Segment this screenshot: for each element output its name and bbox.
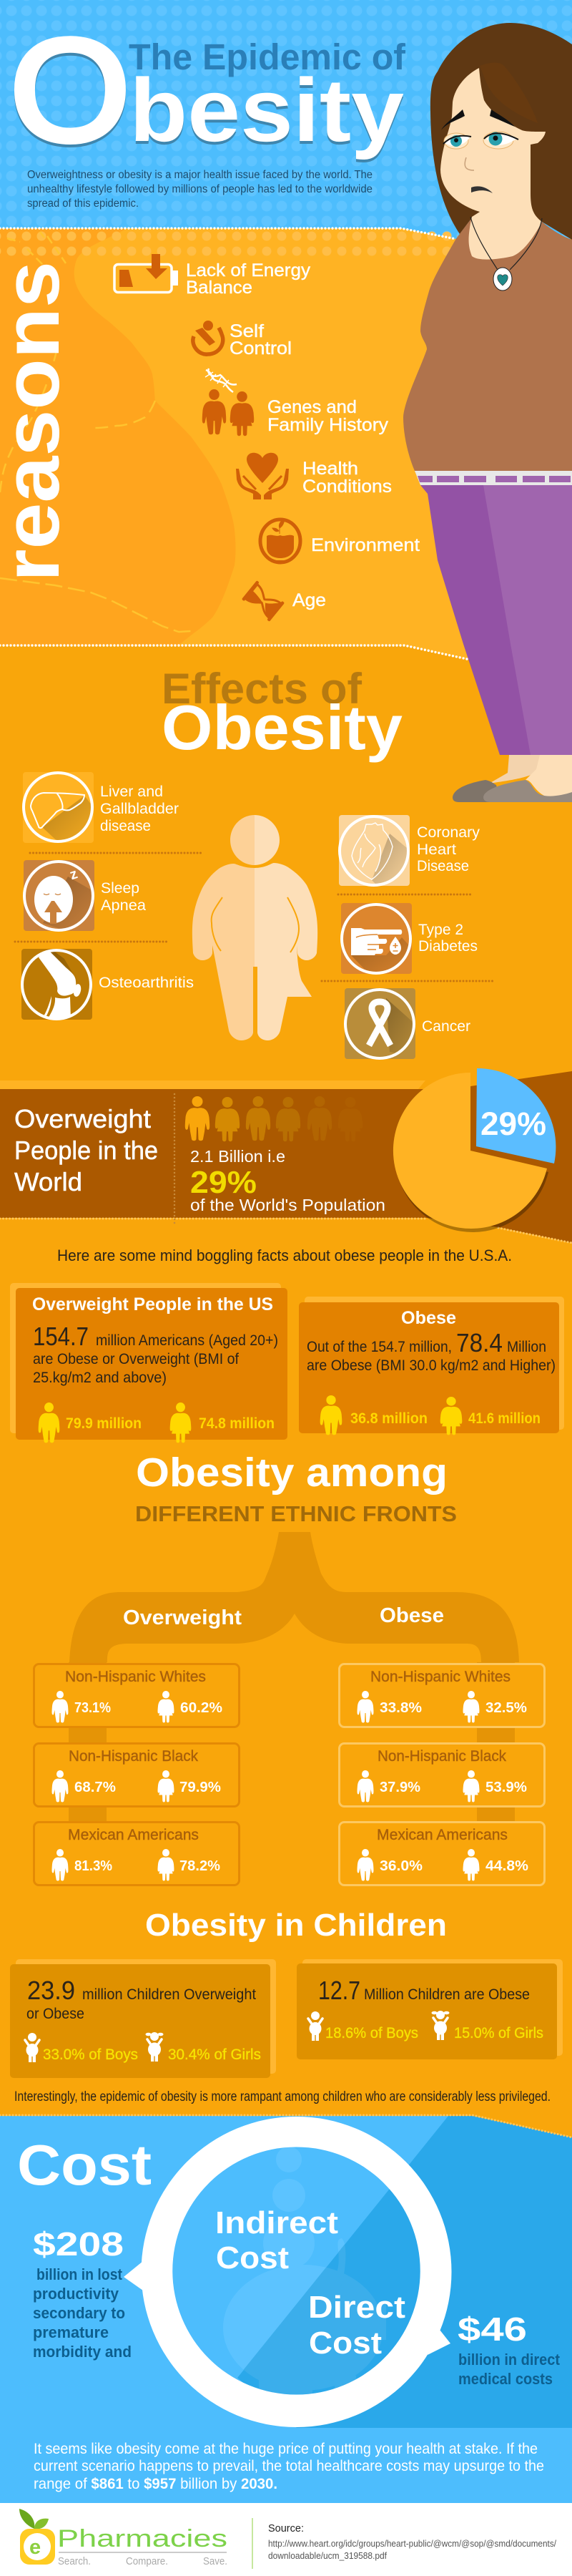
effect: cancer: Cancer xyxy=(422,1018,470,1035)
source: http://www.heart.org/idc/groups/heart-public/@wcm/@sop/@smd/documents/ xyxy=(268,2539,556,2549)
icon: woman xyxy=(170,1402,191,1443)
reason: health conditions xyxy=(236,453,392,499)
heading: People in the xyxy=(14,1136,158,1165)
panel: overweight people in the US: 79.9 million xyxy=(66,1415,142,1432)
panel: children overweight or obese: million Children Overweight xyxy=(82,1986,256,2003)
label: direct cost: Direct xyxy=(308,2290,405,2325)
panel: overweight people in the world: of the World's Population xyxy=(190,1196,385,1214)
panel: overweight people in the world: 2.1 Billion i.e xyxy=(190,1147,285,1166)
label: direct cost xyxy=(308,2290,405,2361)
box: overweight, non-hispanic black: 79.9% xyxy=(179,1780,221,1795)
effect: liver and gallbladder disease: Gallbladder xyxy=(100,801,179,817)
effect: coronary heart disease: Heart xyxy=(417,841,456,858)
icon: girl xyxy=(146,2032,163,2062)
box: overweight, non-hispanic whites: 73.1% xyxy=(74,1700,111,1716)
callout: $208 indirect: $208 xyxy=(33,2225,124,2263)
panel: overweight people in the US: 25.kg/m2 and above) xyxy=(33,1370,167,1386)
footer xyxy=(0,2503,572,2576)
label: obese branch: Obese xyxy=(380,1604,444,1627)
text: healthcare cost projection: It seems like obesity come at the huge price of putting your health at stake. If the xyxy=(34,2440,538,2457)
callout: $46 direct: medical costs xyxy=(458,2370,553,2388)
box: obese, non-hispanic black: Non-Hispanic Black xyxy=(378,1748,506,1765)
icon: man xyxy=(320,1395,342,1435)
icon: finger and blood drop xyxy=(341,903,415,977)
text: mind boggling facts intro: Here are some mind boggling facts about obese people in the U.S.A. xyxy=(57,1246,512,1264)
panel: children overweight or obese: 30.4% of Girls xyxy=(168,2046,261,2063)
reason: genes and family history: Genes and xyxy=(267,397,357,417)
label: overweight branch: Overweight xyxy=(123,1606,242,1629)
icon: sleeping head with mask: z xyxy=(68,866,79,883)
effect: sleep apnea xyxy=(24,860,146,931)
title: The Epidemic of Obesity: besity xyxy=(129,61,404,160)
heading: Effects of Obesity: Obesity xyxy=(162,692,403,763)
effect: cancer xyxy=(345,988,470,1059)
effect: coronary heart disease xyxy=(339,815,480,887)
pointer: indirect cost xyxy=(124,2261,143,2290)
box: overweight, non-hispanic black: Non-Hispanic Black xyxy=(69,1748,198,1765)
box: obese, mexican americans: Mexican Americans xyxy=(377,1827,508,1843)
callout: $208 indirect: premature xyxy=(33,2323,109,2341)
panel: obese in the US: are Obese (BMI 30.0 kg/m2 and Higher) xyxy=(307,1357,556,1374)
panel: children overweight or obese: or Obese xyxy=(26,2006,84,2022)
reason: genes and family history xyxy=(202,369,389,436)
effect: osteoarthritis: Osteoarthritis xyxy=(99,975,194,991)
icon: boy xyxy=(25,2033,39,2062)
title: The Epidemic of Obesity: besity xyxy=(129,64,404,163)
box: overweight, mexican americans: 81.3% xyxy=(74,1858,112,1874)
logo: ePharmacies xyxy=(19,2509,227,2567)
effect: liver and gallbladder disease: Liver and xyxy=(100,784,163,800)
section background: header xyxy=(0,0,572,247)
box: obese, non-hispanic whites: Non-Hispanic Whites xyxy=(370,1669,511,1685)
box: obese, non-hispanic whites: 33.8% xyxy=(380,1700,422,1716)
icon: awareness ribbon xyxy=(345,988,418,1059)
callout: $46 direct: $46 xyxy=(458,2311,527,2348)
reason: self control xyxy=(193,321,292,358)
panel: cost background xyxy=(0,2115,572,2503)
intro text xyxy=(27,169,373,210)
heading: Effects of Obesity: Effects of xyxy=(162,665,363,713)
effect: type 2 diabetes xyxy=(341,903,478,977)
reason: environment: Environment xyxy=(311,535,420,555)
label: indirect cost: Cost xyxy=(216,2240,289,2275)
box: overweight, non-hispanic whites: Non-Hispanic Whites xyxy=(65,1669,206,1685)
source: downloadable/ucm_319588.pdf xyxy=(268,2551,388,2561)
icon: battery xyxy=(114,254,178,292)
panel: children overweight or obese xyxy=(10,1959,276,2078)
source: Source: xyxy=(268,2522,304,2534)
effect: sleep apnea: Sleep xyxy=(101,880,139,897)
box: obese, non-hispanic black: 37.9% xyxy=(380,1780,420,1795)
box: overweight, non-hispanic black xyxy=(34,1743,239,1806)
panel: children obese xyxy=(297,1959,563,2059)
effect: liver and gallbladder disease xyxy=(23,772,179,852)
box: obese, non-hispanic whites xyxy=(339,1664,545,1727)
dotted divider: header to reasons xyxy=(0,228,456,239)
panel: obese in the US: 78.4 xyxy=(456,1328,503,1357)
box: obese, non-hispanic whites: 32.5% xyxy=(485,1700,527,1716)
illustration: sad overweight woman xyxy=(403,23,572,802)
heading: obesity among different ethnic fronts xyxy=(135,1450,457,1526)
panel: obese in the US: 41.6 million xyxy=(468,1410,541,1427)
ring with pointers xyxy=(142,2117,452,2427)
box: overweight, non-hispanic whites xyxy=(34,1664,239,1727)
pointer: direct cost xyxy=(428,2330,450,2355)
box: overweight, mexican americans: Mexican Americans xyxy=(68,1827,199,1843)
reason: age: Age xyxy=(292,590,326,610)
panel: children obese: 12.7 xyxy=(318,1976,360,2005)
panel: obese in the US xyxy=(299,1297,564,1435)
callout: $208 indirect: secondary to xyxy=(33,2304,125,2322)
panel: obese in the US: Out of the 154.7 million, xyxy=(307,1339,452,1355)
logo: ePharmacies: Compare. xyxy=(126,2555,168,2567)
pie chart: 29% xyxy=(393,1068,556,1232)
reason: self control: Control xyxy=(230,338,292,358)
icon: piggy bank and coins xyxy=(223,2147,386,2398)
logo: ePharmacies: Search. xyxy=(58,2555,91,2567)
reason: lack of energy balance xyxy=(114,254,311,298)
panel: overweight people in the US: are Obese or Overweight (BMI of xyxy=(33,1351,239,1367)
effect: osteoarthritis xyxy=(21,948,194,1020)
box: obese, mexican americans xyxy=(339,1822,545,1885)
panel: overweight people in the world xyxy=(0,1071,572,1243)
effect: sleep apnea: Apnea xyxy=(101,897,146,914)
reason: lack of energy balance: Lack of Energy xyxy=(186,260,311,280)
effect: type 2 diabetes: Diabetes xyxy=(418,938,478,955)
icon: sleeping head with mask xyxy=(24,860,97,931)
box: obese, non-hispanic black: 53.9% xyxy=(485,1780,527,1795)
reason: health conditions: Conditions xyxy=(302,477,392,497)
icon: hands and heart xyxy=(236,453,289,499)
effect: coronary heart disease: Disease xyxy=(417,858,469,874)
panel: children overweight or obese: 23.9 xyxy=(27,1976,75,2005)
title: The Epidemic of Obesity xyxy=(10,9,406,175)
callout: $208 indirect: billion in lost xyxy=(36,2265,123,2283)
reason: lack of energy balance: Balance xyxy=(186,278,252,298)
panel: overweight people in the US: Overweight People in the US xyxy=(32,1294,273,1314)
reason: age xyxy=(242,580,326,622)
text: healthcare cost projection: range of $861 to $957 billion by 2030. xyxy=(34,2475,277,2492)
box: obese, mexican americans: 44.8% xyxy=(485,1858,528,1874)
title: The Epidemic of Obesity: The Epidemic of xyxy=(129,36,406,77)
heading: Overweight xyxy=(14,1104,151,1133)
panel: overweight people in the US: 154.7 xyxy=(33,1322,89,1351)
icon: person in ring xyxy=(193,321,223,354)
icon: knee joint xyxy=(21,948,92,1020)
effect: type 2 diabetes: Type 2 xyxy=(418,922,463,938)
source xyxy=(268,2522,556,2561)
intro text: Overweightness or obesity is a major health issue faced by the world. The xyxy=(27,169,373,181)
heading: obesity among different ethnic fronts: DIFFERENT ETHNIC FRONTS xyxy=(135,1501,457,1526)
panel: obese in the US: 36.8 million xyxy=(350,1410,428,1427)
effect: coronary heart disease: Coronary xyxy=(417,824,480,841)
box: obese, mexican americans: 36.0% xyxy=(380,1858,423,1874)
section background: reasons xyxy=(0,228,572,659)
box: overweight, non-hispanic black: 68.7% xyxy=(74,1780,116,1795)
intro text: unhealthy lifestyle followed by millions of people has led to the worldwide xyxy=(27,183,373,195)
text: healthcare cost projection xyxy=(34,2440,544,2492)
figure: body silhouette xyxy=(192,815,317,1040)
callout: $208 indirect xyxy=(33,2225,132,2361)
heading: obesity in children: Obesity in Children xyxy=(145,1908,447,1943)
callout: $46 direct xyxy=(458,2311,561,2388)
band background xyxy=(0,1071,572,1243)
box: overweight, non-hispanic whites: 60.2% xyxy=(180,1700,222,1716)
heading xyxy=(14,1104,158,1196)
reason: environment xyxy=(260,519,420,564)
panel: overweight people in the US xyxy=(10,1283,287,1443)
icon: dna and couple xyxy=(202,369,254,436)
icon: woman xyxy=(440,1397,462,1435)
icon: plant in recycling ring xyxy=(260,519,300,564)
label: direct cost: Cost xyxy=(309,2326,382,2361)
panel: children obese: Million Children are Obese xyxy=(364,1986,530,2003)
callout: $208 indirect: productivity xyxy=(33,2285,119,2303)
panel: obese in the US: Million xyxy=(507,1339,546,1355)
dotted divider: reasons to effects xyxy=(0,645,467,659)
bracket connector xyxy=(69,1532,519,1823)
panel: overweight people in the world: 29% xyxy=(190,1165,257,1200)
box: obese, non-hispanic black xyxy=(339,1743,545,1806)
icon: boy xyxy=(308,2011,322,2041)
panel: overweight people in the US: 74.8 million xyxy=(199,1415,275,1432)
panel: children obese: 15.0% of Girls xyxy=(454,2025,543,2041)
icon: girl xyxy=(432,2011,449,2040)
box: overweight, mexican americans xyxy=(34,1822,239,1885)
callout: $46 direct: billion in direct xyxy=(458,2351,561,2368)
title: The Epidemic of Obesity: O xyxy=(10,12,130,175)
logo: ePharmacies: Pharmacies xyxy=(57,2525,227,2552)
heading: obesity among different ethnic fronts: Obesity among xyxy=(136,1450,448,1496)
panel: children obese: 18.6% of Boys xyxy=(325,2025,418,2041)
effect: liver and gallbladder disease: disease xyxy=(100,818,151,834)
pie chart: 29%: 29% xyxy=(480,1106,546,1142)
pictogram row xyxy=(185,1096,363,1141)
icon: anatomical heart xyxy=(339,815,411,887)
label: indirect cost: Indirect xyxy=(215,2205,338,2240)
title: The Epidemic of Obesity: O xyxy=(10,9,130,172)
label: indirect cost xyxy=(215,2205,338,2275)
panel: overweight people in the US: million Americans (Aged 20+) xyxy=(96,1332,278,1349)
icon: liver xyxy=(22,771,94,843)
logo: ePharmacies: e xyxy=(29,2536,41,2559)
panel: children overweight or obese: 33.0% of Boys xyxy=(43,2046,138,2063)
logo: ePharmacies: Save. xyxy=(203,2555,227,2567)
heading: Cost: Cost xyxy=(17,2133,152,2197)
reason: genes and family history: Family History xyxy=(267,415,389,435)
panel: obese in the US: Obese xyxy=(401,1308,456,1328)
reason: health conditions: Health xyxy=(302,459,358,479)
icon: man xyxy=(39,1402,59,1443)
reason: self control: Self xyxy=(230,321,264,341)
heading: Effects of Obesity xyxy=(162,665,403,763)
icon: hourglass xyxy=(242,580,285,622)
intro text: spread of this epidemic. xyxy=(27,197,139,210)
heading: World xyxy=(14,1167,82,1196)
box: overweight, mexican americans: 78.2% xyxy=(179,1858,220,1874)
callout: $208 indirect: morbidity and xyxy=(33,2343,132,2361)
